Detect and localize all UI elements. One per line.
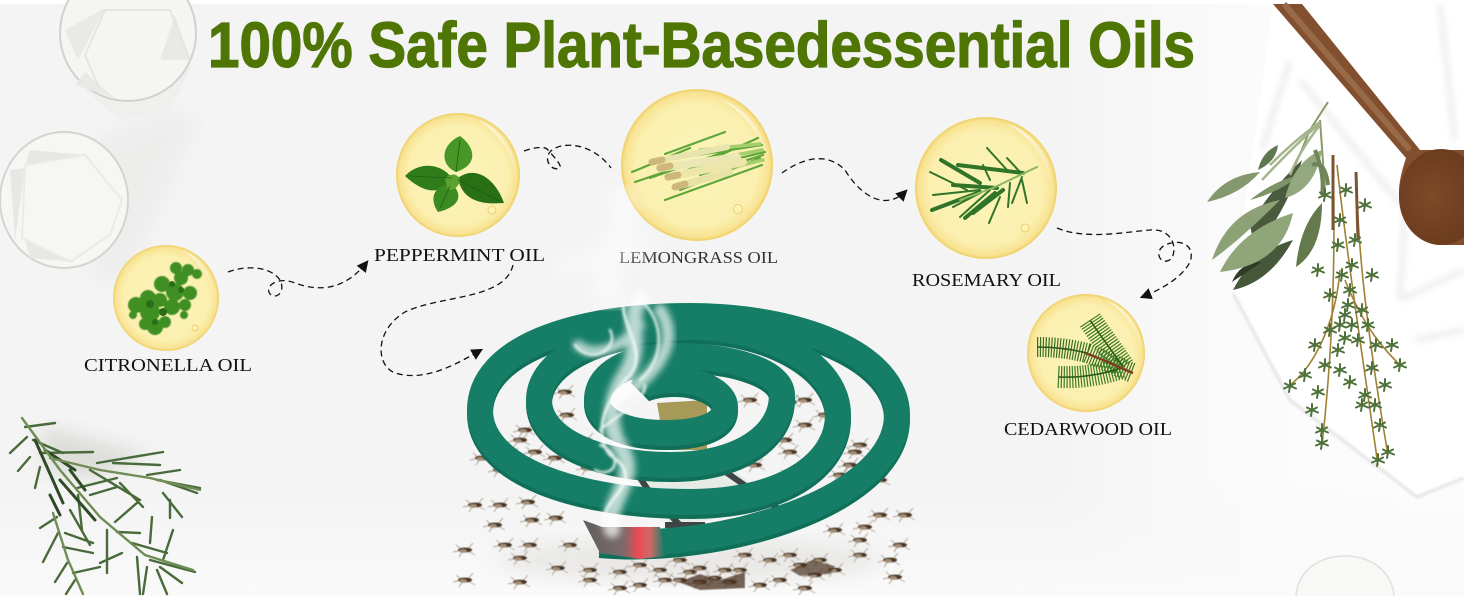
label: peppermint oil: PEPPERMINT OIL [374,245,545,265]
glasses top left [0,0,200,280]
dashed arrow: rosemary to cedarwood [1057,228,1191,297]
white cloth [1233,4,1464,497]
icon: lemongrass stalks [632,132,765,200]
oil bubble: citronella [113,245,219,351]
label: lemongrass oil: LEMONGRASS OIL [619,248,778,267]
dashed arrow: citronella to peppermint [228,262,367,296]
oil bubble: peppermint [396,113,520,237]
dashed arrow: peppermint to coil [381,265,513,376]
oil bubble: cedarwood [1027,294,1145,412]
label: rosemary oil: ROSEMARY OIL [912,270,1061,290]
label: cedarwood oil: CEDARWOOD OIL [1004,419,1172,439]
oil bubble: lemongrass [621,89,773,241]
sage sprig [1207,102,1328,290]
oil bubble: rosemary [915,117,1057,259]
coil side shadow [480,320,897,546]
lower background fade [0,480,1464,596]
wooden spoon [1273,4,1464,245]
smoke [560,195,668,530]
coil stand [640,400,780,525]
dead mosquitoes [453,385,915,595]
dashed arrow: lemongrass to rosemary [782,159,906,200]
icon: parsley [128,262,202,335]
icon: rosemary sprig [930,148,1037,223]
thyme sprigs [1284,155,1406,466]
icon: mint leaves [405,136,504,212]
icon: cedar sprig [1037,320,1133,377]
dashed arrow: peppermint to lemongrass [524,145,611,169]
mosquito coil [480,316,897,546]
title: 100% Safe Plant-Basedessential Oils [208,9,1195,81]
label: citronella oil: CITRONELLA OIL [84,355,252,375]
glass bottom right [1296,556,1394,596]
coil top face [480,316,897,542]
burning tip [583,520,665,559]
rosemary bottom left [10,418,200,594]
